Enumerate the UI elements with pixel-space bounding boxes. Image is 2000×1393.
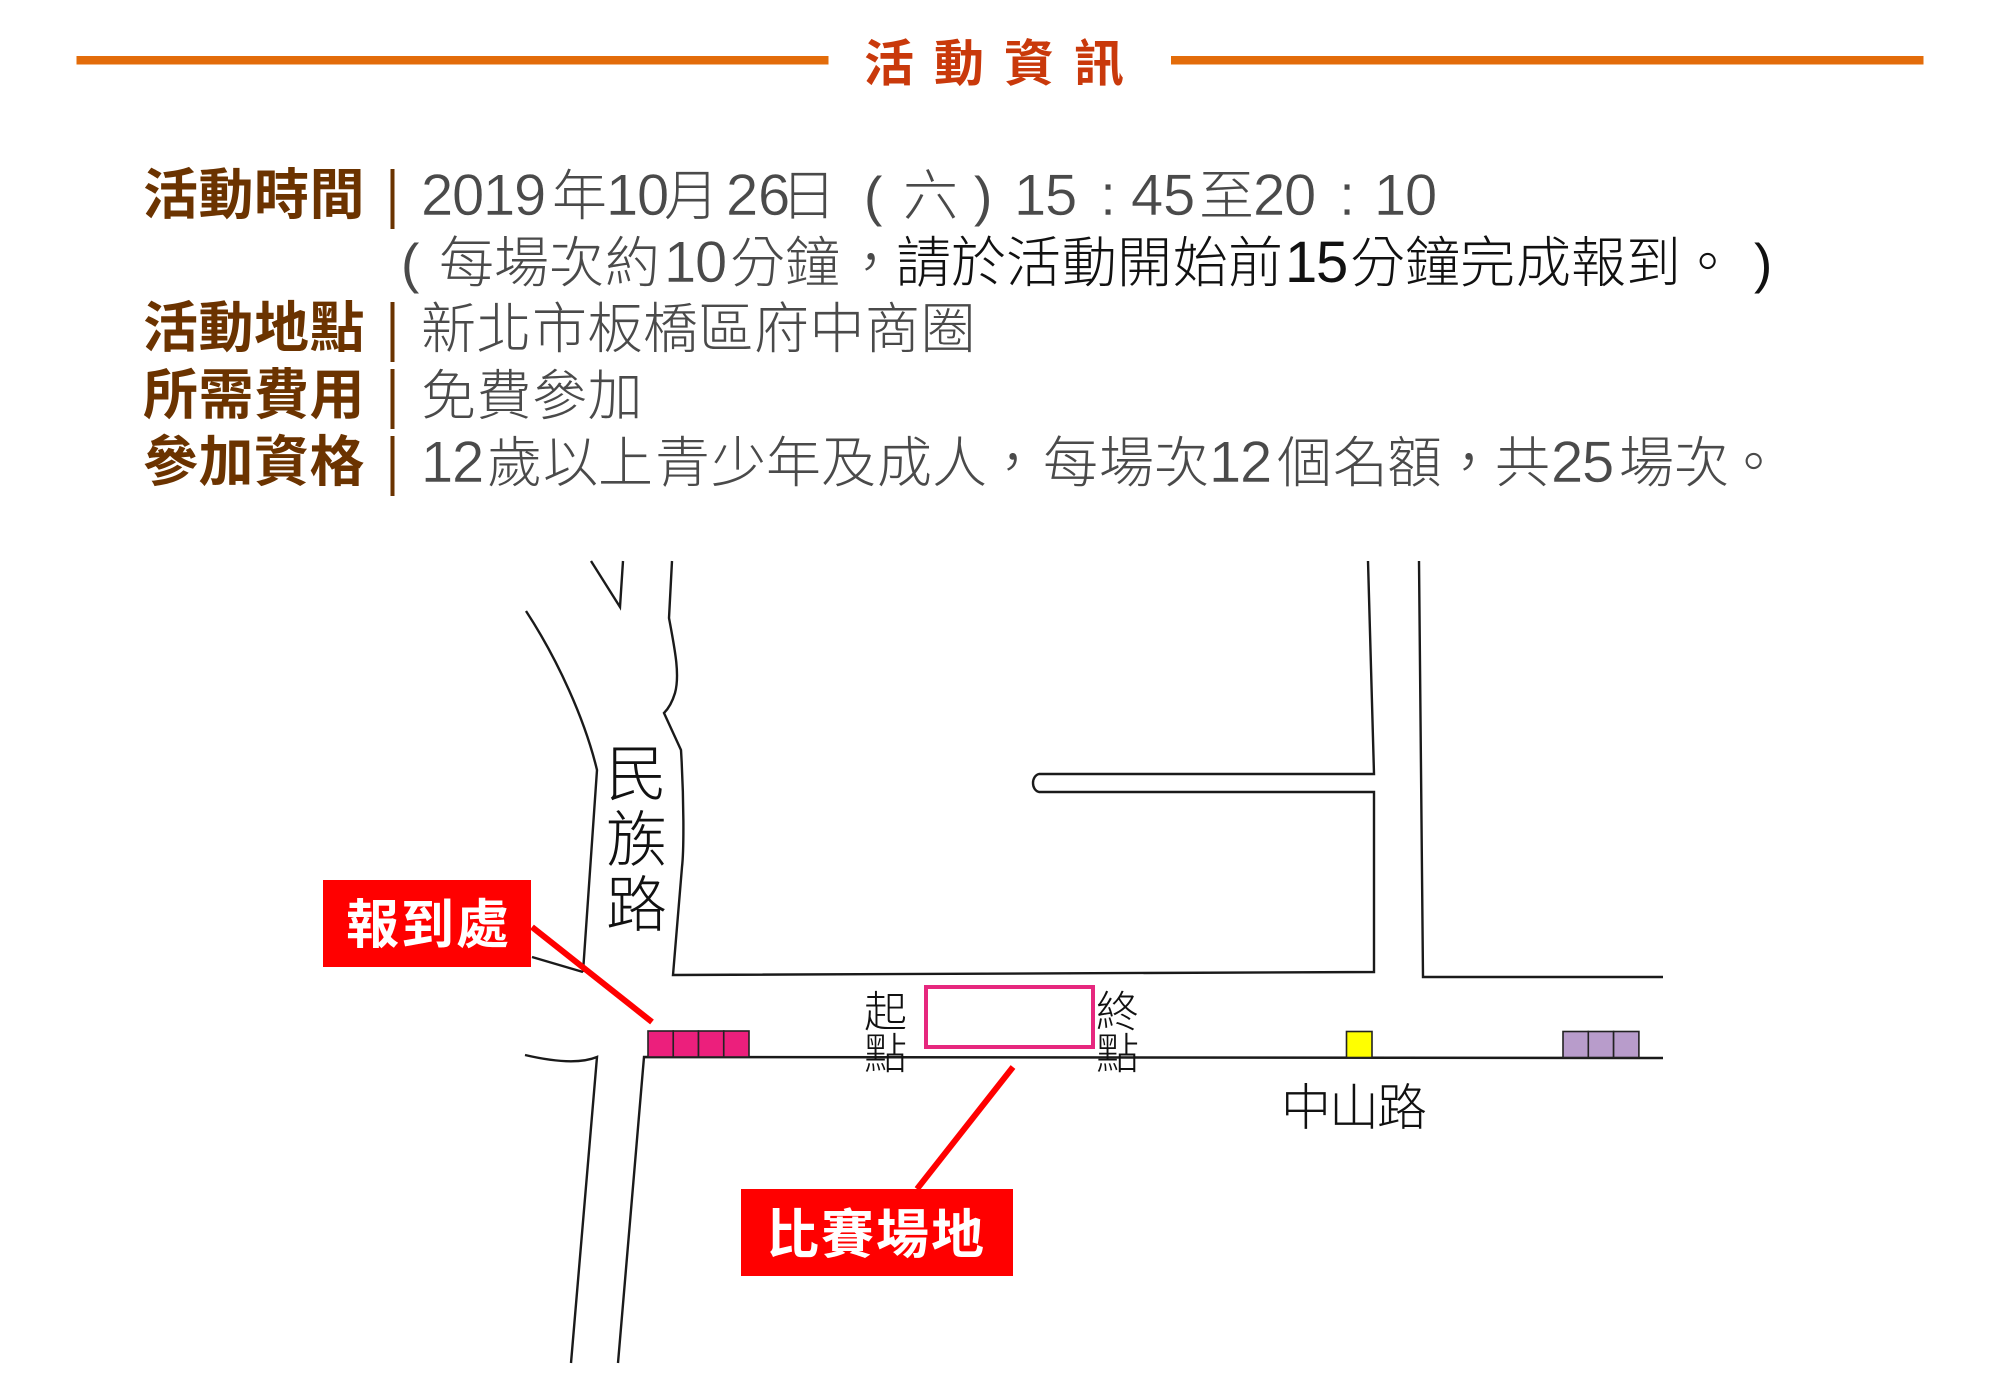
map: race venue [323,561,1663,1363]
row: fee [143,364,643,429]
title: 活動資訊 [864,36,1124,92]
callout: registration desk: 報到處 [346,896,509,955]
marker: race area [926,987,1093,1047]
row: event time: 活動時間 [143,164,365,226]
callout: race venue [741,1067,1013,1276]
road outlines [525,561,1663,1363]
row: event time note [401,230,1772,295]
row: event time note: 請於活動開始前15分鐘完成報到。) [896,230,1772,295]
section header: title with side rules [76,36,1924,92]
row: venue: 新北市板橋區府中商圈 [421,298,976,360]
row: event time: 2019年10月26日(六) 15:45至20:10 [421,163,1437,228]
road label: Zhongshan Road: 中山路 [1281,1080,1427,1136]
row: venue [143,297,976,362]
label: start point: 起點 [864,989,907,1079]
row: venue: 活動地點 [143,297,365,359]
marker: yellow booth [1346,1032,1372,1058]
marker: magenta booths [648,1031,749,1057]
row: fee: 免費參加 [421,365,643,427]
callout: registration desk [323,880,652,1022]
row: fee: 所需費用 [143,364,365,426]
row: eligibility: 參加資格 [143,431,365,493]
row: eligibility: 12歲以上青少年及成人，每場次12個名額，共25場次。 [421,430,1781,495]
callout: race venue: 比賽場地 [766,1206,984,1265]
marker: purple booths [1563,1032,1639,1058]
road label: Minzu Road: 民族路 [606,740,667,939]
label: finish point: 終點 [1096,989,1139,1079]
panel: event details [143,163,1781,496]
row: event time note: (每場次約10分鐘， [401,230,898,295]
